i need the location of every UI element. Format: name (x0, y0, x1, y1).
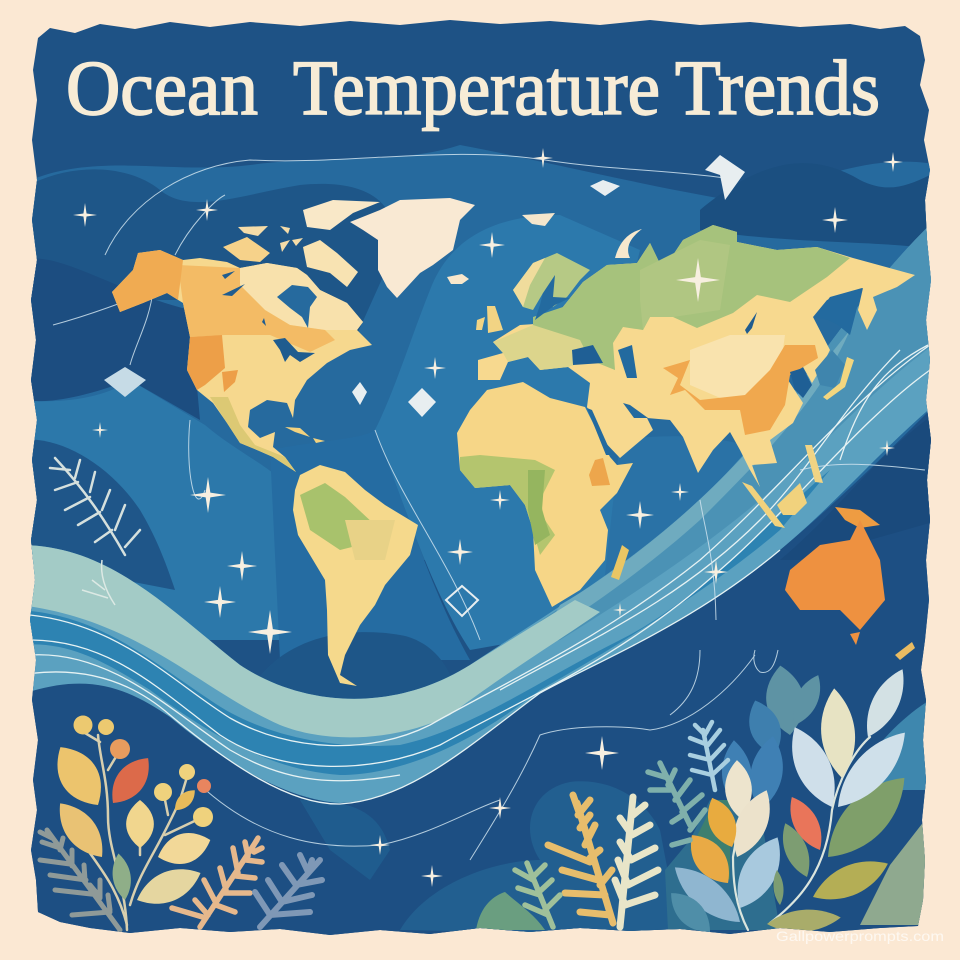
plant: right foliage (662, 663, 930, 941)
lower deep water (20, 400, 940, 950)
bottom left blue leaf (662, 884, 719, 941)
deep channel (20, 470, 830, 775)
Baffin Island (303, 240, 358, 287)
Sea of Okhotsk (815, 288, 862, 335)
Canada orange band (178, 265, 335, 352)
Central Russia darker (640, 240, 730, 330)
Australia (785, 520, 885, 630)
Black Sea (572, 345, 603, 365)
fern: yellow (548, 795, 613, 923)
bottom olive leaf (766, 907, 842, 935)
fern: cream (615, 797, 658, 927)
Sumatra (742, 482, 785, 528)
Britain (487, 306, 503, 333)
Mongolia Tibet pale (690, 335, 785, 400)
right ocean (600, 436, 800, 620)
dark hill under South America (280, 632, 441, 660)
New Guinea (835, 507, 880, 528)
teal patch below current (300, 800, 390, 880)
Great Lakes (273, 338, 315, 362)
China orange (663, 345, 818, 435)
Arctic island west (223, 237, 270, 262)
Hudson Bay (277, 285, 317, 328)
central ocean deep (271, 472, 470, 660)
watermark: Gallpowerprompts.com (776, 928, 944, 944)
Congo green (528, 470, 550, 545)
dark swell top left (31, 170, 385, 332)
back leaves teal (762, 663, 809, 738)
dark swell top right (700, 170, 930, 248)
Borneo (777, 483, 807, 515)
Svalbard (522, 213, 555, 226)
plant: far left pale sprig on current (82, 560, 115, 605)
dark teal base (665, 800, 780, 930)
lighter blue Atlantic (375, 215, 640, 650)
Iceland (447, 274, 469, 284)
world map (112, 198, 915, 686)
Europe pale (493, 325, 590, 370)
Lake Baikal (745, 312, 757, 334)
Africa green belt (460, 455, 555, 555)
Canada east pale (240, 263, 363, 330)
title (66, 44, 880, 131)
Madagascar (611, 545, 629, 580)
blue back leaves (719, 739, 755, 811)
lower right navy wedge (927, 418, 931, 523)
stems (80, 730, 203, 930)
stars (73, 148, 903, 887)
South America (293, 465, 418, 686)
Africa (457, 382, 633, 607)
teal hill bottom centre (400, 781, 680, 935)
Arctic islands small (238, 226, 303, 252)
New Zealand dots (895, 642, 915, 660)
title: Ocean (66, 44, 258, 131)
fern: muted left (40, 830, 120, 930)
Persian Gulf (623, 403, 648, 418)
Yellow Sea (790, 368, 812, 398)
diamond markers (104, 155, 745, 616)
Scandinavia west coast pale (513, 258, 545, 307)
current lines (20, 345, 930, 804)
dark swell left (20, 258, 200, 420)
ocean current band (20, 215, 940, 804)
Caspian Sea (618, 345, 637, 378)
Ethiopia orange (589, 458, 610, 486)
upper right current tint (540, 228, 931, 640)
Tasmania (850, 632, 860, 645)
Sea of Japan (815, 350, 845, 388)
fern: pale blue (690, 722, 728, 790)
Japan (823, 357, 854, 400)
fern: teal green (648, 763, 705, 845)
fading pale extension (556, 333, 848, 612)
Mexico olive (210, 397, 296, 472)
Amazon green (300, 483, 375, 550)
Greenland (350, 198, 475, 298)
plant: left branch (45, 716, 215, 930)
lighter blue left ocean (30, 386, 279, 640)
Red Sea (587, 408, 612, 455)
Interior tint (345, 520, 395, 560)
ocean mid layer (20, 145, 940, 560)
back patch right (860, 700, 930, 790)
Baltic Sea (535, 275, 570, 320)
plant: upper left fern (50, 458, 140, 555)
fern: back bottom right (885, 830, 930, 925)
fern: slate blue (255, 855, 322, 927)
Colorado patch (222, 370, 238, 392)
thin route lines (53, 154, 925, 860)
Alaska orange (112, 250, 183, 312)
stems (733, 737, 870, 930)
Eurasia (478, 225, 915, 487)
fern: green (515, 863, 560, 927)
fern: peach (172, 838, 262, 927)
title: Trends (675, 44, 880, 131)
Siberia and Europe green (533, 225, 850, 370)
Ireland (476, 317, 485, 330)
outer current (20, 215, 940, 803)
Canadian lakes (222, 271, 266, 326)
pale current (20, 545, 600, 737)
hill: green patch bottom left (476, 892, 545, 930)
title: Temperature (293, 44, 660, 131)
Arctic arc island (615, 229, 642, 258)
Cuba (285, 427, 325, 443)
Philippines (805, 445, 823, 483)
Scandinavia (513, 253, 590, 310)
North America (112, 198, 475, 472)
US west orange (187, 335, 225, 390)
Ellesmere Island (303, 200, 380, 230)
dark hump behind left fern (20, 439, 175, 590)
